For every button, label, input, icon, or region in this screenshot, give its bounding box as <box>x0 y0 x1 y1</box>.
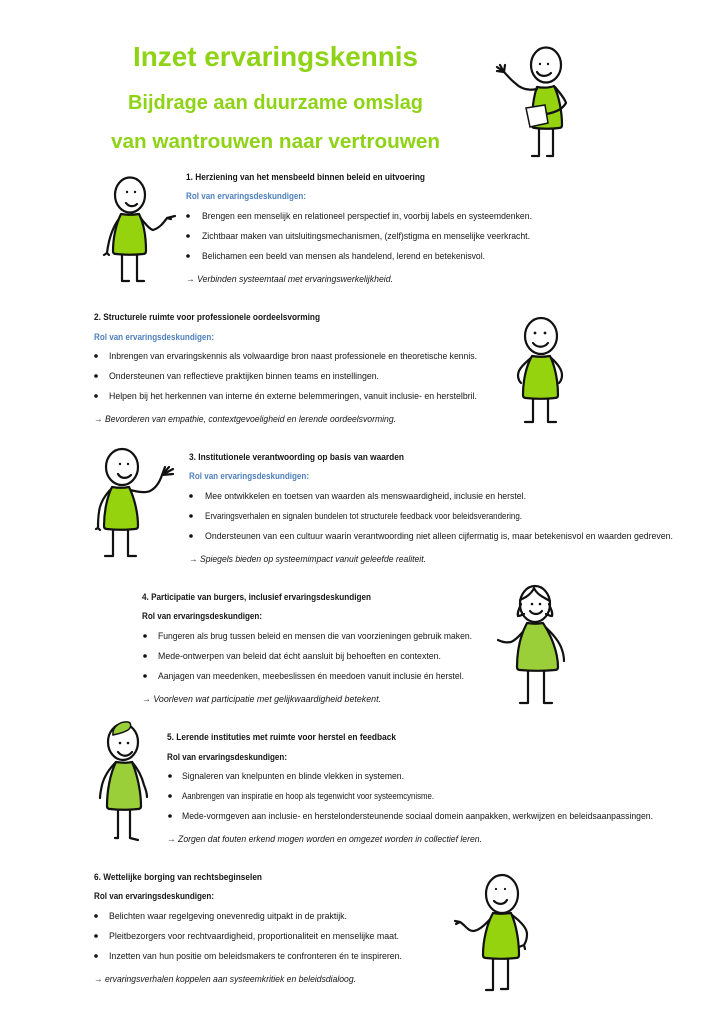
heading: 5. Lerende instituties met ruimte voor herstel en feedback <box>167 732 397 743</box>
bullet list: Aanbrengen van inspiratie en hoop als tegenwicht voor systeemcynisme. <box>182 791 434 802</box>
bullet list <box>143 631 472 682</box>
bullet list <box>168 771 653 822</box>
conclusion: → ervaringsverhalen koppelen aan systeemkritiek en beleidsdialoog. <box>94 974 356 985</box>
bullet list: Mede-ontwerpen van beleid dat écht aansluit bij behoeften en contexten. <box>158 651 441 662</box>
role label: Rol van ervaringsdeskundigen: <box>189 471 309 482</box>
bullet list: Belichten waar regelgeving onevenredig uitpakt in de praktijk. <box>109 911 347 922</box>
bullet list: Fungeren als brug tussen beleid en mensen die van voorzieningen gebruik maken. <box>158 631 472 642</box>
bullet list: Ervaringsverhalen en signalen bundelen tot structurele feedback voor beleidsverandering. <box>205 511 522 522</box>
panel: section 3 <box>189 452 673 565</box>
bullet list <box>189 491 673 542</box>
bullet list: Brengen een menselijk en relationeel perspectief in, voorbij labels en systeemdenken. <box>202 211 532 222</box>
bullet list <box>94 351 477 402</box>
panel: section 4 <box>142 592 472 705</box>
bullet list: Inzetten van hun positie om beleidsmakers te confronteren én te inspireren. <box>109 951 402 962</box>
icon: standing figure <box>518 318 562 422</box>
role label: Rol van ervaringsdeskundigen: <box>186 191 306 202</box>
heading: 4. Participatie van burgers, inclusief ervaringsdeskundigen <box>142 592 371 603</box>
bullet list: Mede-vormgeven aan inclusie- en herstelondersteunende sociaal domein aanpakken, werkwijzen en beleidsaanpassingen. <box>182 811 653 822</box>
bullet list: Helpen bij het herkennen van interne én externe belemmeringen, vanuit inclusie- en herstelbril. <box>109 391 477 402</box>
role label: Rol van ervaringsdeskundigen: <box>94 332 214 343</box>
bullet list: Belichamen een beeld van mensen als handelend, lerend en betekenisvol. <box>202 251 485 262</box>
heading: 1. Herziening van het mensbeeld binnen beleid en uitvoering <box>186 172 425 183</box>
role label: Rol van ervaringsdeskundigen: <box>94 891 214 902</box>
conclusion: → Voorleven wat participatie met gelijkwaardigheid betekent. <box>142 694 381 705</box>
panel: section 1 <box>186 172 532 285</box>
heading: 6. Wettelijke borging van rechtsbeginselen <box>94 872 262 883</box>
panel: section 5 <box>167 732 653 845</box>
icon: figure pointing right <box>104 178 175 281</box>
icon: figure waving right <box>96 449 173 556</box>
role label: Rol van ervaringsdeskundigen: <box>167 752 287 763</box>
conclusion: → Bevorderen van empathie, contextgevoeligheid en lerende oordeelsvorming. <box>94 414 396 425</box>
bullet list: Inbrengen van ervaringskennis als volwaardige bron naast professionele en theoretische kennis. <box>109 351 477 362</box>
icon: figure with green hair <box>100 722 147 840</box>
icon: female figure <box>498 586 564 703</box>
bullet list: Pleitbezorgers voor rechtvaardigheid, proportionaliteit en menselijke maat. <box>109 931 399 942</box>
bullet list: Aanjagen van meedenken, meebeslissen én meedoen vanuit inclusie én herstel. <box>158 671 464 682</box>
title block <box>111 41 440 153</box>
subtitle line 1: Bijdrage aan duurzame omslag <box>128 92 423 114</box>
panel: section 2 <box>94 312 477 425</box>
icon: waving figure with paper <box>497 48 566 156</box>
bullet list: Ondersteunen van reflectieve praktijken binnen teams en instellingen. <box>109 371 379 382</box>
heading: 2. Structurele ruimte voor professionele oordeelsvorming <box>94 312 320 323</box>
bullet list <box>94 911 402 962</box>
conclusion: → Zorgen dat fouten erkend mogen worden en omgezet worden in collectief leren. <box>167 834 482 845</box>
conclusion: → Spiegels bieden op systeemimpact vanuit geleefde realiteit. <box>189 554 426 565</box>
heading: 3. Institutionele verantwoording op basis van waarden <box>189 452 404 463</box>
bullet list: Ondersteunen van een cultuur waarin verantwoording niet alleen cijfermatig is, maar betekenisvol en waarden gedreven. <box>205 531 673 542</box>
bullet list: Mee ontwikkelen en toetsen van waarden als menswaardigheid, inclusie en herstel. <box>205 491 526 502</box>
subtitle line 2: van wantrouwen naar vertrouwen <box>111 131 440 153</box>
title: Inzet ervaringskennis <box>133 41 418 72</box>
bullet list: Signaleren van knelpunten en blinde vlekken in systemen. <box>182 771 404 782</box>
role label: Rol van ervaringsdeskundigen: <box>142 611 262 622</box>
panel: section 6 <box>94 872 402 985</box>
bullet list <box>186 211 532 262</box>
bullet list: Zichtbaar maken van uitsluitingsmechanismen, (zelf)stigma en menselijke veerkracht. <box>202 231 530 242</box>
icon: figure gesturing left <box>455 875 527 990</box>
conclusion: → Verbinden systeemtaal met ervaringswerkelijkheid. <box>186 274 393 285</box>
